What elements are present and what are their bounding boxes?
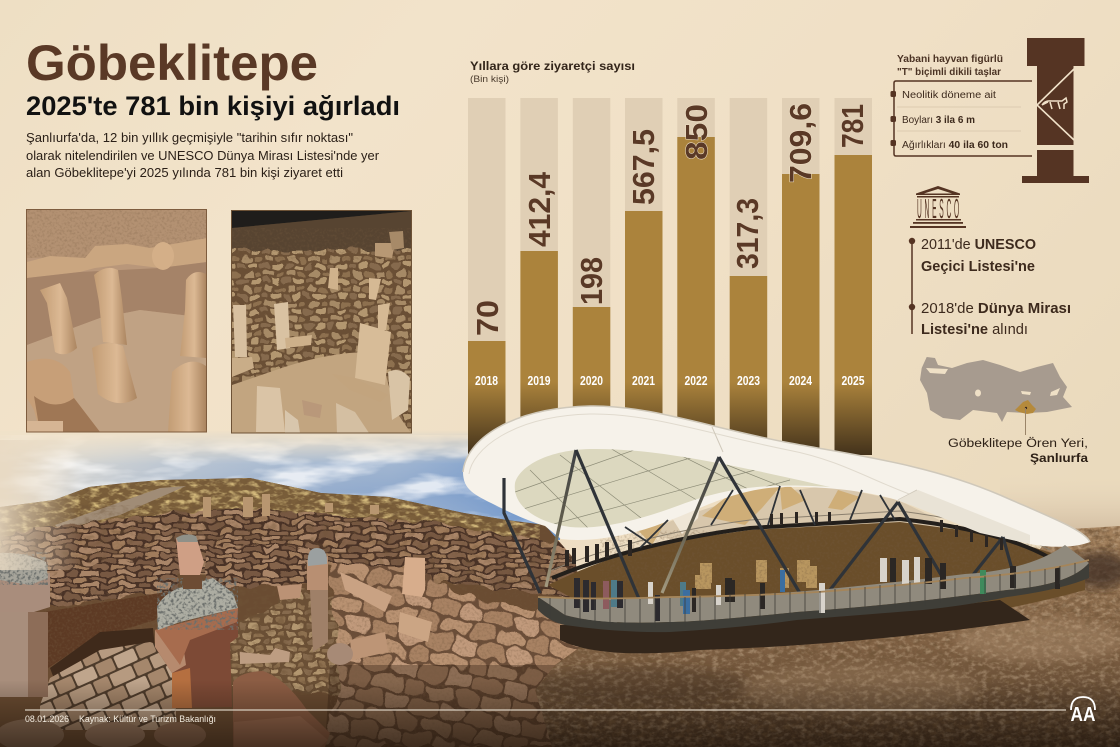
dots [890, 91, 896, 146]
map highlight: Şanlıurfa [1015, 400, 1036, 414]
intro text: alan Göbeklitepe'yi 2025 yılında 781 bin kişi ziyaret etti [26, 166, 343, 180]
icon: T-shaped pillar [1022, 38, 1089, 183]
left haze [0, 440, 80, 570]
footer rule [25, 709, 1066, 711]
bar 2019 [520, 98, 558, 455]
subtitle: 2025'te 781 bin kişiyi ağırladı [26, 91, 400, 121]
faint upper stones [203, 494, 379, 517]
chart unit: (Bin kişi) [470, 74, 509, 85]
bar 2024: 709,6 [783, 103, 818, 183]
foreground boulders [233, 671, 330, 747]
bar 2023 [730, 98, 767, 455]
steel trusses [504, 450, 1015, 613]
T-pillar heading: "T" biçimli dikili taşlar [897, 67, 1001, 78]
intro text: Şanlıurfa'da, 12 bin yıllık geçmişiyle "tarihin sıfır noktası" [26, 131, 353, 145]
fabric tents [634, 486, 860, 545]
visitor centre shelter [463, 406, 1090, 653]
T-pillar facts [890, 38, 1089, 183]
icon: UNESCO temple: UNESCO [917, 195, 959, 225]
chart title: Yıllara göre ziyaretçi sayısı [470, 59, 635, 73]
timeline text 2011: Geçici Listesi'ne [921, 259, 1035, 275]
pillar: back left [176, 534, 204, 589]
curved walls [48, 550, 178, 607]
central flat stones [240, 648, 290, 664]
T-pillar facts text [902, 90, 1008, 151]
canopy [463, 406, 1090, 547]
timeline text 2011: 2011'de UNESCO [921, 237, 1036, 253]
under-pit darkness [560, 600, 1030, 653]
carved face stone [152, 242, 174, 270]
glass roof [515, 448, 830, 530]
source text: Kaynak: Kültür ve Turizm Bakanlığı [79, 714, 216, 724]
timeline text 2018: Listesi'ne alındı [921, 322, 1028, 338]
T-pillar heading: Yabani hayvan figürlü [897, 54, 1003, 65]
sky photo band [0, 430, 560, 540]
bracket [894, 81, 1032, 156]
pillar: center [307, 548, 328, 652]
icon: UNESCO temple [910, 186, 966, 228]
walkway edge [538, 563, 1089, 632]
bottom shade [0, 680, 1120, 747]
icon: AA logo: AA [1070, 704, 1096, 726]
pillar: left foreground [0, 553, 50, 697]
bar 2022: 2022 [684, 373, 708, 388]
bar 2023: 2023 [737, 373, 760, 388]
bar 2020: 198 [574, 257, 609, 305]
pillar: right [402, 557, 425, 597]
walkway deck [538, 545, 1089, 623]
visitors: front [574, 557, 1060, 621]
bar 2021 [625, 98, 662, 455]
intro text [26, 131, 379, 180]
bar 2018: 70 [470, 300, 505, 336]
photo: excavation site [0, 440, 600, 747]
white fabric [667, 505, 700, 534]
bar 2025 [834, 98, 872, 455]
T-pillar facts text: Boyları 3 ila 6 m [902, 115, 975, 126]
ground photo: right side [535, 504, 1120, 747]
photo: excavated enclosure [231, 210, 412, 434]
T-pillar heading [897, 54, 1003, 78]
central rubble [228, 590, 345, 695]
bar 2021: 567,5 [626, 129, 661, 205]
bar 2020 [573, 98, 610, 455]
timeline [909, 237, 1071, 338]
T-pillar facts text: Neolitik döneme ait [902, 90, 996, 101]
bar chart [468, 98, 872, 455]
bar 2022 [677, 98, 715, 455]
map label: Göbeklitepe Ören Yeri, [948, 436, 1088, 450]
upper terraces [0, 508, 600, 600]
distant skyline [640, 486, 960, 540]
icon: AA logo [1070, 697, 1096, 726]
intro text: olarak nitelendirilen ve UNESCO Dünya Mirası Listesi'nde yer [26, 149, 379, 163]
railing [538, 560, 1089, 628]
bar 2019: 2019 [528, 373, 550, 388]
bar 2024 [782, 98, 820, 455]
photo: standing stones close-up [26, 210, 207, 432]
excavated stones in pit [695, 560, 817, 589]
bar 2025: 781 [835, 104, 870, 148]
map label: Şanlıurfa [1030, 451, 1088, 465]
rear walkway [552, 519, 1050, 578]
flagstone floor [40, 642, 176, 730]
bar 2021: 2021 [632, 373, 655, 388]
bar 2022: 850 [679, 104, 714, 160]
timeline text 2018 [921, 301, 1071, 338]
pillar: main foreground [155, 578, 238, 708]
sunken floor [44, 590, 178, 668]
distant hillside [29, 478, 517, 536]
visitors: rear [565, 512, 1003, 566]
title: Göbeklitepe [26, 35, 318, 91]
map of Türkiye [920, 357, 1072, 435]
bar 2018 [468, 98, 506, 455]
timeline text 2011 [921, 237, 1036, 275]
bar 2025: 2025 [842, 373, 864, 388]
source text: 08.01.2026 [25, 714, 69, 724]
bar 2018: 2018 [475, 373, 498, 388]
bar 2020: 2020 [580, 373, 603, 388]
bar 2019: 412,4 [522, 171, 557, 247]
stone rampart [325, 565, 600, 747]
T-pillar facts text: Ağırlıkları 40 ila 60 ton [902, 140, 1008, 151]
timeline text 2018: 2018'de Dünya Mirası [921, 301, 1071, 317]
pit back wall [548, 520, 1085, 640]
bar 2023: 317,3 [730, 198, 765, 269]
bar 2024: 2024 [789, 373, 813, 388]
map label [948, 436, 1088, 465]
